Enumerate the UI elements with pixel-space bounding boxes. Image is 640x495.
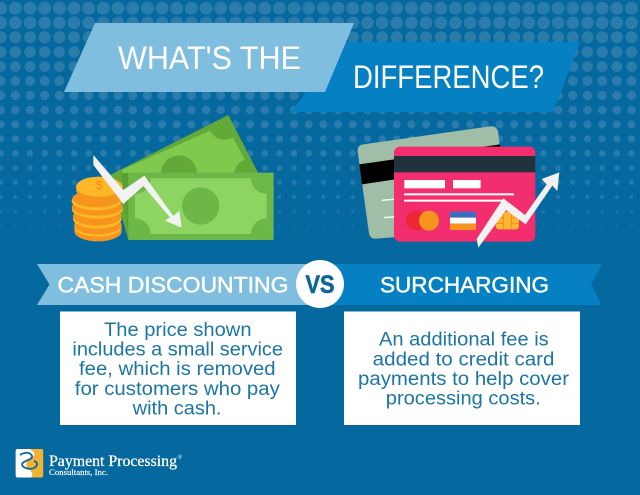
panel: surcharging description: payments to help cover — [358, 369, 570, 390]
icon: back banknote — [110, 115, 258, 240]
panel: surcharging description: An additional fee is — [379, 330, 549, 351]
panel: cash discounting description: with cash. — [132, 398, 222, 419]
icon: logo mark — [16, 449, 43, 478]
ribbon: cash discounting — [37, 264, 320, 305]
title banner: difference: DIFFERENCE? — [353, 59, 544, 95]
vs badge — [296, 260, 344, 308]
title banner: what's the — [64, 23, 354, 92]
panel: cash discounting description — [60, 312, 296, 425]
icon: front card — [394, 147, 535, 242]
panel: cash discounting description: fee, which is removed — [79, 359, 276, 380]
logo: Payment Processing Consultants: Payment Processing — [49, 453, 177, 470]
illustration: credit cards and rising arrow — [358, 126, 559, 248]
arrow: rising — [477, 172, 559, 248]
ribbon: surcharging — [320, 264, 602, 305]
icon: coin stack — [72, 177, 123, 241]
icon: back card — [358, 126, 507, 239]
icon: coin stack: $ — [96, 178, 103, 192]
title banner: what's the: WHAT'S THE — [118, 40, 301, 76]
illustration: cash, coins and falling arrow — [72, 115, 274, 241]
logo: Payment Processing Consultants: Consultants, Inc. — [49, 467, 108, 477]
panel: surcharging description: added to credit card — [373, 350, 554, 371]
panel: surcharging description — [344, 312, 580, 425]
panel: cash discounting description: includes a small service — [72, 340, 283, 361]
ribbon: surcharging: SURCHARGING — [380, 272, 549, 298]
ribbon: cash discounting: CASH DISCOUNTING — [58, 272, 288, 298]
logo: Payment Processing Consultants — [16, 449, 183, 478]
vs badge: VS — [306, 271, 334, 299]
panel: cash discounting description: for customers who pay — [75, 379, 280, 400]
title banner: difference — [291, 42, 580, 112]
logo: Payment Processing Consultants: ® — [178, 454, 182, 461]
arrow: falling — [93, 155, 182, 228]
panel: surcharging description: processing costs. — [386, 388, 541, 409]
icon: front banknote — [122, 173, 274, 240]
panel: cash discounting description: The price shown — [104, 320, 252, 341]
